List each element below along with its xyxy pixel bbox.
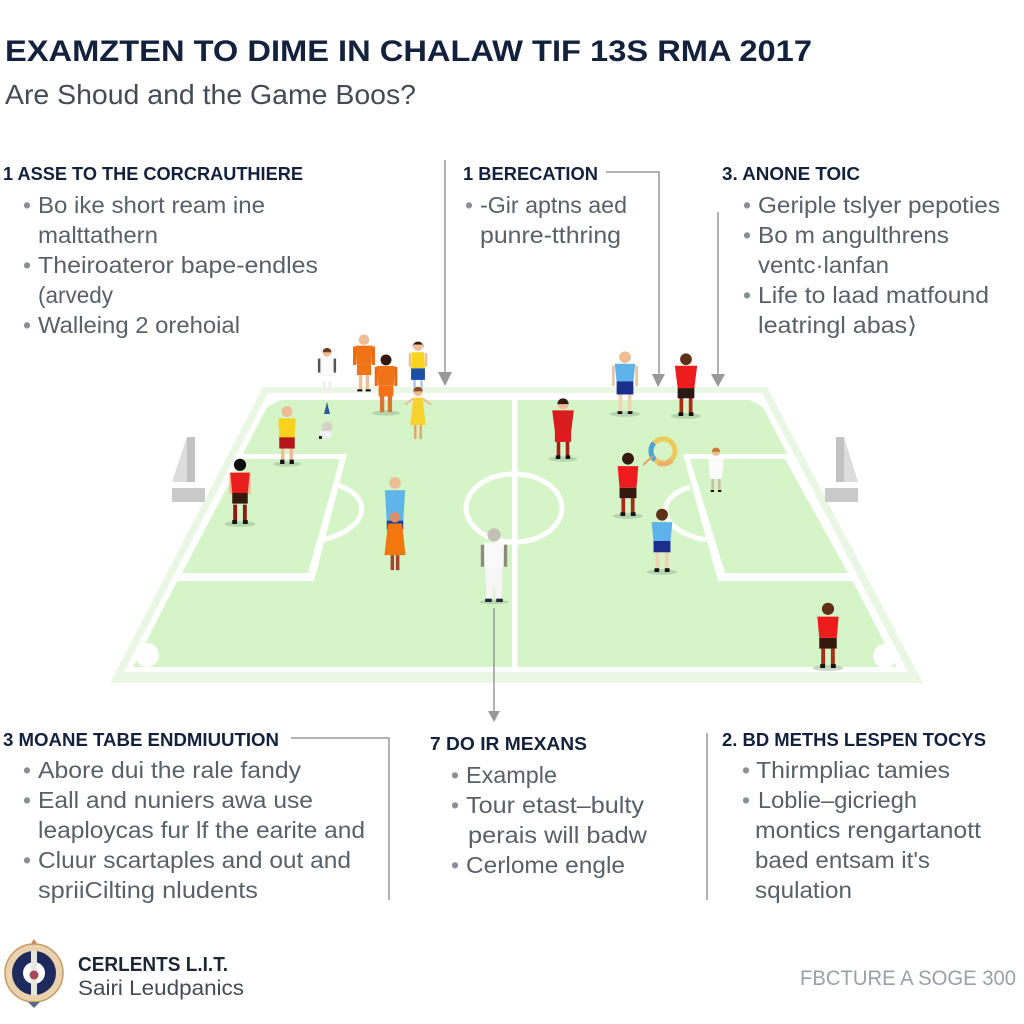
panel: top right: leatringl abas⟩ (758, 312, 917, 338)
player: orange kit dark hair (372, 354, 400, 416)
panel: bottom left: Cluur scartaples and out and (38, 847, 351, 873)
panel: top right: Bo m angulthrens (758, 222, 949, 248)
panel: bottom right: • (742, 787, 750, 813)
right goal (825, 437, 858, 502)
player: white kit (318, 348, 336, 394)
footer: organisation name: CERLENTS L.I.T. (78, 954, 228, 976)
panel: bottom right (722, 730, 986, 903)
player: red kit (549, 398, 577, 462)
panel: top right: • (743, 222, 751, 248)
arrow: section 2 left (438, 160, 452, 386)
player: blue shirt lower right (647, 509, 677, 575)
player: referee in white (480, 528, 508, 604)
panel: bottom right: 2. BD METHS LESPEN TOCYS (722, 730, 986, 750)
panel: top centre: • (465, 192, 473, 218)
panel: top right: • (743, 192, 751, 218)
panel: bottom left: spriiCilting nludents (38, 877, 258, 903)
panel: top right: Geriple tslyer pepoties (758, 192, 1000, 218)
player: red shirt bottom right (812, 603, 844, 671)
panel: top right: ventc·lanfan (758, 252, 889, 278)
panel: top right: Life to laad matfound (758, 282, 989, 308)
small figure on the touchline (319, 402, 332, 439)
panel: top left: Bo ike short ream ine (38, 192, 265, 218)
panel: top right: • (743, 282, 751, 308)
player: blue shirt top (610, 351, 640, 417)
panel: top centre (463, 164, 627, 248)
panel: top right: 3. ANONE TOIC (722, 164, 860, 184)
panel: bottom left: leaploycas fur lf the earite and (38, 817, 365, 843)
panel: bottom centre: Cerlome engle (466, 852, 625, 878)
panel: bottom centre (430, 734, 647, 878)
panel: bottom left: Abore dui the rale fandy (38, 757, 302, 783)
panel: bottom centre: 7 DO IR MEXANS (430, 734, 587, 754)
panel: top right (722, 164, 1000, 338)
panel: bottom centre: • (451, 762, 459, 788)
panel: bottom right: squlation (755, 877, 852, 903)
player: red shirt top (671, 353, 701, 419)
divider: bottom right (706, 733, 708, 900)
panel: top left: • (23, 252, 31, 278)
football pitch (110, 387, 923, 683)
panel: top left: Walleing 2 orehoial (38, 312, 240, 338)
player: yellow and blue kit (409, 341, 427, 391)
panel: bottom left: Eall and nuniers awa use (38, 787, 313, 813)
player: yellow shirt red shorts (273, 406, 301, 467)
arrow: section 3 (711, 212, 725, 387)
arrow: referee down (488, 608, 500, 722)
panel: top left: • (23, 312, 31, 338)
panel: bottom right: • (742, 757, 750, 783)
player: red shirt black hair (224, 459, 256, 527)
panel: top left: 1 ASSE TO THE CORCRAUTHIERE (3, 164, 303, 184)
ring ball (643, 439, 675, 465)
panel: bottom centre: • (451, 852, 459, 878)
player: red shirt centre right (613, 453, 643, 519)
panel: bottom centre: Example (466, 762, 557, 788)
panel: bottom centre: perais will badw (468, 822, 647, 848)
panel: bottom left: • (23, 757, 31, 783)
panel: bottom left: • (23, 787, 31, 813)
footer: organisation name (78, 954, 244, 1000)
panel: bottom right: Loblie–gicriegh (758, 787, 917, 813)
icon: crest logo (5, 939, 63, 1008)
panel: top left: Theiroateror bape-endles (38, 252, 318, 278)
panel: bottom left: • (23, 847, 31, 873)
player: blue shirt behind (385, 477, 405, 530)
panel: top left (3, 164, 318, 338)
panel: bottom right: Thirmpliac tamies (756, 757, 950, 783)
title: EXAMZTEN TO DIME IN CHALAW TIF 13S RMA 2017 (5, 35, 812, 68)
panel: bottom centre: • (451, 792, 459, 818)
bracket: bottom left (291, 738, 389, 900)
player: girl in yellow dress (405, 387, 431, 439)
subtitle: Are Shoud and the Game Boos? (5, 79, 416, 110)
footer: right note: FBCTURE A SOGE 300 (800, 967, 1016, 990)
panel: top left: (arvedy (38, 282, 113, 308)
panel: top left: • (23, 192, 31, 218)
panel: top centre: punre-tthring (480, 222, 621, 248)
panel: bottom right: baed entsam it's (755, 847, 930, 873)
panel: top left: malttathern (38, 222, 158, 248)
panel: bottom left (3, 730, 365, 903)
footer: organisation name: Sairi Leudpanics (78, 977, 244, 1000)
player: orange kit bald (353, 334, 375, 391)
arrow: section 2 right (606, 172, 665, 387)
panel: top centre: 1 BERECATION (463, 164, 598, 184)
panel: bottom left: 3 MOANE TABE ENDMIUUTION (3, 730, 279, 750)
panel: bottom right: montics rengartanott (755, 817, 982, 843)
panel: top centre: -Gir aptns aed (480, 192, 627, 218)
left goal (172, 437, 205, 502)
panel: bottom centre: Tour etast–bulty (466, 792, 645, 818)
player: white kit goalkeeper (708, 448, 724, 492)
player: orange dress (384, 512, 406, 570)
